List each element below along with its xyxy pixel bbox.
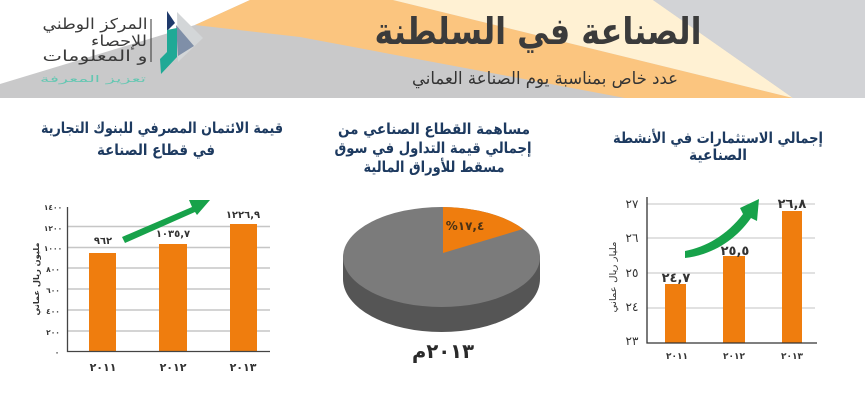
pie value: %١٧,٤ bbox=[446, 219, 484, 233]
x axis labels bbox=[90, 361, 257, 374]
value labels: ٢٤,٧ bbox=[662, 271, 690, 286]
y axis labels: ٢٤ bbox=[626, 300, 638, 314]
logo icon bbox=[160, 11, 203, 74]
panel: bank credit bbox=[32, 119, 283, 374]
logo name: و المعلومات bbox=[42, 47, 148, 65]
y axis labels: ٢٣ bbox=[626, 334, 639, 348]
logo name: للإحصاء bbox=[91, 32, 147, 50]
y axis title: مليار ريال عماني bbox=[609, 241, 619, 312]
logo tagline: تعزيز المعرفة bbox=[40, 75, 147, 85]
pie year: ٢٠١٣م bbox=[412, 339, 474, 363]
x axis labels: ٢٠١١ bbox=[666, 352, 688, 362]
heading: market share: مسقط للأوراق المالية bbox=[364, 158, 504, 176]
pie slice bbox=[443, 207, 523, 253]
x axis labels: ٢٠١٣ bbox=[781, 352, 803, 362]
header banner bbox=[0, 0, 865, 98]
y axis labels: ١٢٠٠ bbox=[44, 224, 62, 233]
y axis labels: ٢٧ bbox=[626, 197, 639, 211]
logo name bbox=[42, 15, 148, 65]
y axis labels: ٨٠٠ bbox=[46, 265, 60, 274]
arrow: curved up trend bbox=[685, 199, 759, 258]
x axis labels: ٢٠١١ bbox=[90, 361, 116, 374]
heading: investments: الصناعية bbox=[689, 146, 747, 164]
bar chart: bank credit bbox=[32, 200, 270, 374]
value labels: ٢٥,٥ bbox=[721, 244, 749, 259]
heading: market share: إجمالي قيمة التداول في سوق bbox=[334, 139, 532, 157]
value labels bbox=[94, 210, 260, 247]
logo divider bbox=[150, 19, 152, 62]
subtitle: عدد خاص بمناسبة يوم الصناعة العماني bbox=[412, 69, 678, 89]
x axis labels: ٢٠١٢ bbox=[723, 352, 745, 362]
bar chart: investments bbox=[609, 197, 817, 362]
heading: investments: إجمالي الاستثمارات في الأنشطة bbox=[613, 129, 823, 147]
logo bbox=[40, 11, 203, 85]
value labels: ٩٦٢ bbox=[94, 236, 112, 247]
y axis labels: ٤٠٠ bbox=[46, 307, 60, 316]
panel: investments bbox=[609, 129, 823, 362]
y axis labels: ٢٦ bbox=[626, 231, 638, 245]
y axis labels bbox=[626, 197, 639, 348]
heading: bank credit bbox=[41, 119, 283, 159]
arrow: up trend bbox=[122, 200, 210, 243]
y axis labels: ٦٠٠ bbox=[46, 286, 60, 295]
heading: market share: مساهمة القطاع الصناعي من bbox=[338, 120, 530, 138]
heading: bank credit: قيمة الائتمان المصرفي للبنوك التجارية bbox=[41, 119, 283, 137]
logo name: المركز الوطني bbox=[42, 15, 148, 34]
y axis labels: ١٤٠٠ bbox=[44, 203, 62, 212]
heading: market share bbox=[334, 120, 532, 176]
value labels: ١٠٣٥,٧ bbox=[156, 229, 190, 240]
y axis labels: ٢٠٠ bbox=[46, 328, 60, 337]
x axis labels: ٢٠١٣ bbox=[230, 361, 257, 374]
y axis title: مليون ريال عماني bbox=[32, 242, 41, 316]
y axis labels: ١٠٠٠ bbox=[44, 244, 62, 253]
value labels: ١٢٢٦,٩ bbox=[226, 210, 260, 221]
value labels bbox=[662, 197, 806, 286]
y axis labels: ٠ bbox=[55, 348, 59, 357]
y axis labels: ٢٥ bbox=[626, 266, 638, 280]
heading: bank credit: في قطاع الصناعة bbox=[97, 141, 215, 159]
value labels: ٢٦,٨ bbox=[778, 197, 806, 212]
x axis labels bbox=[666, 352, 803, 362]
pie chart bbox=[343, 207, 540, 332]
y axis labels bbox=[44, 203, 62, 357]
panel: market share bbox=[334, 120, 540, 363]
heading: investments bbox=[613, 129, 823, 164]
title: الصناعة في السلطنة bbox=[374, 10, 702, 53]
x axis labels: ٢٠١٢ bbox=[160, 361, 187, 374]
